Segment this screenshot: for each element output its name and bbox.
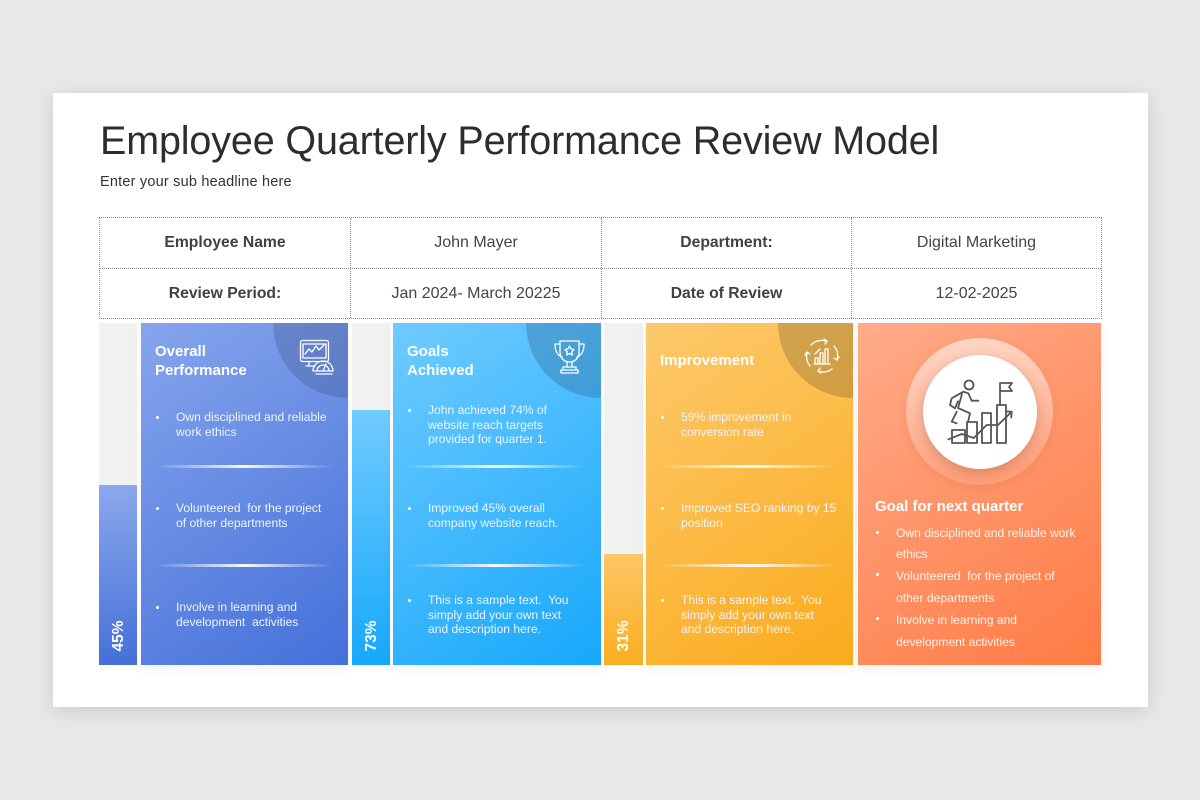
value: department: Digital Marketing: [917, 234, 1036, 251]
bullet: [176, 600, 298, 629]
panel heading: Improvement: [660, 352, 754, 369]
panel heading: Achieved: [407, 362, 474, 379]
bullet: [176, 501, 321, 530]
column divider 1: [350, 218, 351, 318]
bullet: work ethics: [176, 424, 236, 438]
panel heading: [407, 343, 474, 379]
bullet: Own disciplined and reliable: [176, 410, 327, 424]
bullet: [681, 501, 836, 530]
label: review period: Review Period:: [169, 284, 281, 302]
progress bar: goals achieved 73%: [352, 323, 390, 665]
bullet: [896, 565, 1055, 609]
slide sheet: [53, 93, 1148, 707]
panel: overall performance: [141, 323, 348, 665]
bullet: [428, 501, 558, 530]
bullet: Own disciplined and reliable work: [896, 526, 1075, 540]
icon: cycle arrows with chart: [804, 338, 840, 374]
panel heading: Goals: [407, 343, 449, 360]
icon badge: outer ring: [906, 338, 1053, 485]
bullet: website reach targets: [428, 418, 543, 432]
bullet: and description here.: [681, 622, 794, 636]
value: review period: Jan 2024- March 20225: [392, 284, 560, 302]
percent label: 31%: [614, 620, 632, 652]
bullet: This is a sample text. You: [428, 593, 568, 607]
bullet: and description here.: [428, 622, 541, 636]
bullet: John achieved 74% of: [428, 403, 547, 417]
bullet: [896, 523, 1075, 565]
bullet: simply add your own text: [681, 608, 814, 622]
percent label: 73%: [362, 620, 380, 652]
panel heading: [155, 343, 247, 379]
bullet: conversion rate: [681, 424, 764, 438]
panel: improvement: [646, 323, 853, 665]
percent label: 45%: [110, 620, 126, 652]
label: department: Department:: [680, 234, 773, 251]
bullet: company website reach.: [428, 516, 558, 530]
bullet: This is a sample text. You: [681, 593, 822, 607]
bullet: development activities: [896, 635, 1015, 649]
value: date of review: 12-02-2025: [936, 284, 1017, 302]
bullet: 59% improvement in: [681, 410, 791, 424]
corner circle: [778, 248, 928, 398]
bullet: simply add your own text: [428, 608, 561, 622]
bullet: Improved 45% overall: [428, 501, 545, 515]
subtitle: Enter your sub headline here: [100, 174, 292, 190]
info table: [99, 217, 1102, 319]
corner circle: [273, 248, 423, 398]
value: employee name: John Mayer: [434, 234, 518, 251]
bullet: [681, 410, 791, 439]
icon: trophy: [554, 340, 585, 374]
bullet: development activities: [176, 614, 298, 628]
panel: goal for next quarter: [858, 323, 1101, 665]
panel heading: Overall: [155, 343, 206, 360]
bullet: position: [681, 516, 723, 530]
bullet: [428, 403, 547, 446]
title: Employee Quarterly Performance Review Model: [100, 119, 939, 163]
panel heading: Performance: [155, 362, 247, 379]
panel heading: Goal for next quarter: [875, 498, 1023, 515]
row divider: [100, 268, 1101, 269]
icon: monitor and gauge: [300, 340, 334, 375]
icon badge: white disc: [923, 355, 1037, 469]
progress bar: improvement 31%: [604, 323, 643, 665]
progress bar: overall performance 45%: [99, 323, 137, 665]
bullet list: [876, 526, 1076, 649]
bullet: [428, 593, 568, 636]
column divider 3: [851, 218, 852, 318]
bullet: Volunteered for the project: [176, 501, 321, 515]
icon: climbing steps to flag: [947, 380, 1013, 444]
column divider 2: [601, 218, 602, 318]
bullet: [176, 410, 327, 439]
bullet: Volunteered for the project of: [896, 569, 1055, 583]
bullet: Involve in learning and: [176, 600, 297, 614]
panel: goals achieved: [393, 323, 601, 665]
label: date of review: Date of Review: [671, 284, 782, 302]
bullet: provided for quarter 1.: [428, 432, 547, 446]
bullet: of other departments: [176, 516, 288, 530]
bullet: Involve in learning and: [896, 613, 1017, 627]
bullet: Improved SEO ranking by 15: [681, 501, 836, 515]
corner circle: [526, 248, 676, 398]
bullet: [681, 593, 822, 636]
bullet: [896, 609, 1017, 653]
bullet: ethics: [896, 547, 928, 561]
bullet: other departments: [896, 591, 994, 605]
label: employee name: Employee Name: [164, 234, 286, 251]
